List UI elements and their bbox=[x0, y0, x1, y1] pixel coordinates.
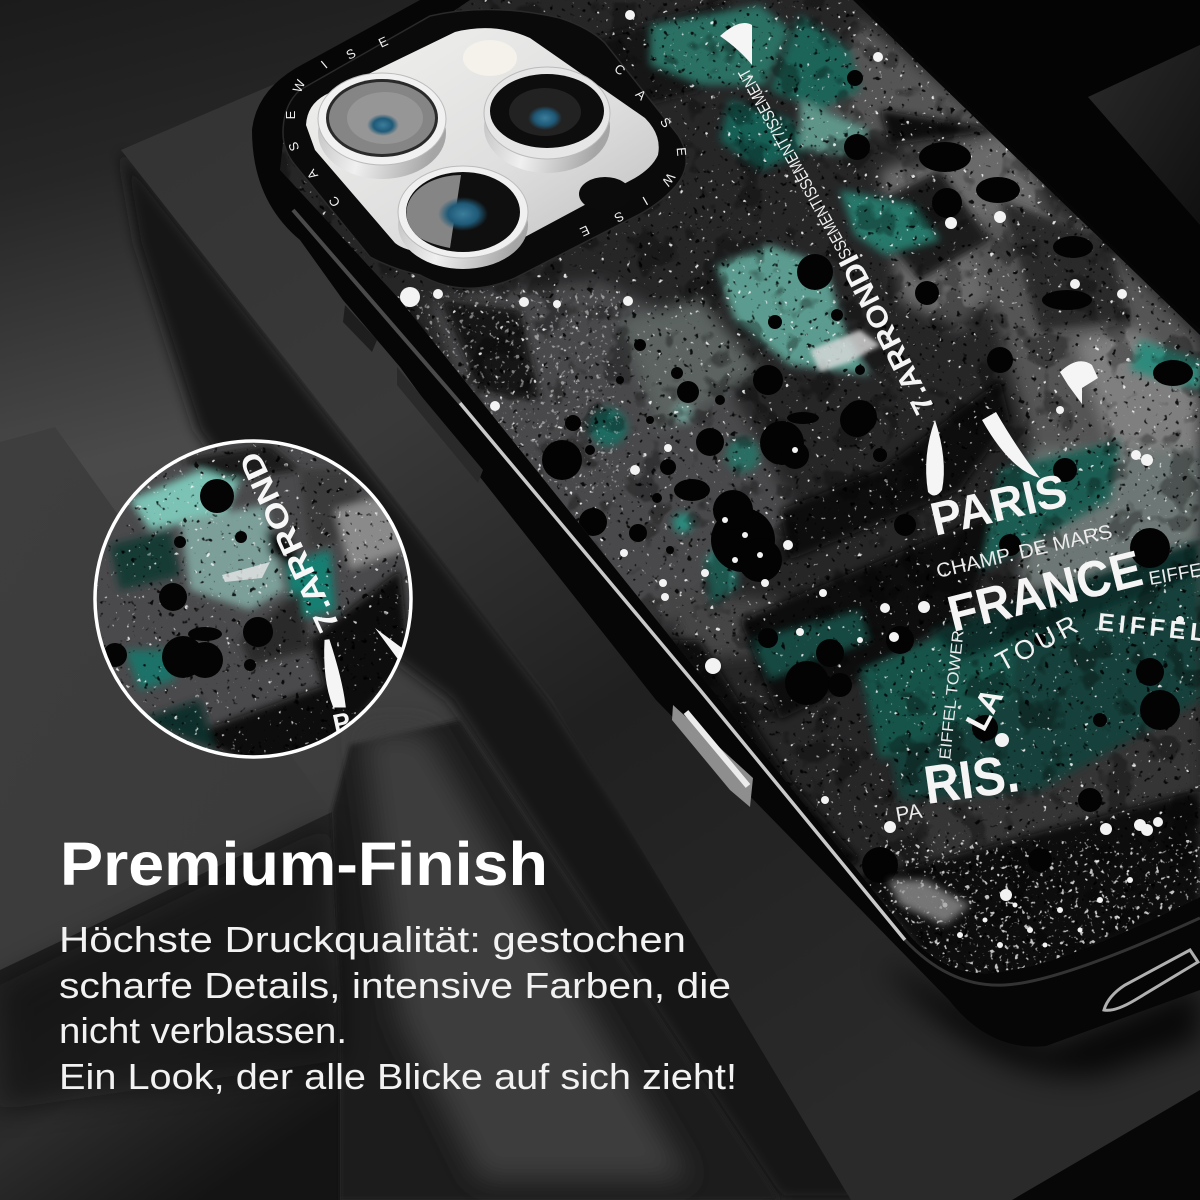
casewise lettering: W bbox=[290, 77, 309, 95]
casewise lettering: A bbox=[633, 86, 649, 103]
lower right shadow corner bbox=[1012, 1090, 1200, 1200]
graffiti: la: LA bbox=[958, 682, 1010, 736]
lens 2 bbox=[484, 67, 610, 173]
bottom front block bbox=[0, 812, 340, 1200]
graffiti: pa: PA bbox=[894, 800, 924, 827]
casewise lettering: S bbox=[611, 208, 626, 226]
side button slot bbox=[397, 367, 483, 483]
casewise lettering: C bbox=[325, 193, 343, 210]
case bumper bbox=[252, 0, 1200, 1047]
graffiti: 7. arrondissement: 7.ARRONDI bbox=[833, 249, 941, 419]
casewise lettering: S bbox=[344, 45, 359, 63]
casewise lettering: E bbox=[376, 33, 390, 51]
lower grey light streak bbox=[362, 730, 690, 1180]
inset splats bbox=[103, 479, 273, 678]
body text bbox=[59, 919, 737, 1097]
phone shadow bbox=[880, 960, 1200, 1077]
ring bbox=[283, 9, 686, 288]
casewise lettering: I bbox=[318, 58, 330, 71]
casewise lettering: E bbox=[283, 110, 298, 119]
rim lower edge bbox=[905, 918, 1200, 985]
white splats bbox=[400, 10, 1184, 948]
casewise lettering: E bbox=[578, 222, 592, 240]
rim bright highlight bbox=[460, 403, 905, 940]
phone body bbox=[250, 0, 1200, 1060]
flash bbox=[463, 40, 517, 76]
casewise lettering: C bbox=[611, 61, 628, 78]
graffiti: paris: PARIS bbox=[925, 463, 1072, 546]
inset spray marks bbox=[327, 640, 343, 705]
dense white splatter at case bottom bbox=[880, 840, 1200, 973]
inset text: p: P bbox=[330, 706, 353, 739]
rim dim edge bbox=[293, 210, 460, 403]
casewise lettering bbox=[283, 33, 689, 240]
teal paint patches bbox=[589, 5, 1200, 800]
window bbox=[306, 28, 659, 255]
platform side face bbox=[121, 150, 880, 1200]
graffiti: paris bottom: RIS. bbox=[920, 743, 1023, 816]
bottom paint speck bbox=[888, 880, 970, 925]
black splats bbox=[526, 70, 1193, 883]
graffiti: tour: TOUR bbox=[991, 609, 1083, 677]
inset border bbox=[95, 441, 411, 757]
inset white paint bbox=[222, 562, 270, 582]
casewise lettering: W bbox=[659, 170, 678, 190]
white paint flecks bbox=[810, 330, 880, 372]
casewise lettering: S bbox=[285, 140, 302, 153]
graffiti: eiffel tower vertical: EIFFEL TOWER bbox=[937, 629, 968, 760]
top right dark wall bbox=[850, 0, 1200, 330]
case artwork bbox=[280, 0, 1200, 974]
casewise lettering: I bbox=[640, 193, 651, 208]
top right block bbox=[1088, 45, 1200, 225]
inset text: 7. arrond: 7.ARROND bbox=[232, 446, 346, 638]
bottom port bbox=[1104, 950, 1198, 1010]
eiffel spray marks bbox=[720, 23, 1098, 496]
noise blobs and splatter bbox=[280, 0, 1200, 881]
grey paint strokes bbox=[430, 20, 1200, 900]
silver side button bbox=[672, 705, 753, 807]
body text: Ein Look, der alle Blicke auf sich zieht! bbox=[59, 1056, 737, 1097]
graffiti: issement repeat: SSEMENTISSEMENT7ISSEMENT bbox=[735, 65, 855, 262]
heading: Premium-Finish bbox=[60, 830, 548, 898]
left block top bbox=[0, 427, 332, 970]
lens 3 bbox=[398, 166, 528, 269]
casewise lettering: S bbox=[657, 115, 675, 131]
microphone hole bbox=[579, 177, 631, 211]
casewise lettering: E bbox=[674, 147, 689, 157]
graffiti: champ de mars: CHAMP. DE MARS bbox=[934, 521, 1115, 583]
side hole bbox=[343, 305, 377, 352]
casewise lettering: A bbox=[303, 166, 321, 182]
zoom circle inset bbox=[90, 436, 416, 765]
camera module bbox=[283, 9, 689, 288]
body text: nicht verblassen. bbox=[59, 1010, 347, 1051]
under text darkening bbox=[0, 825, 340, 1110]
lens 1 bbox=[318, 73, 446, 179]
body text: scharfe Details, intensive Farben, die bbox=[59, 965, 731, 1006]
body text: Höchste Druckqualität: gestochen bbox=[59, 919, 686, 960]
lower dark channel bbox=[332, 720, 780, 1200]
dense white splatter at case left bbox=[400, 290, 620, 490]
graffiti: france: FRANCE bbox=[942, 539, 1148, 643]
black paint strokes bbox=[440, 0, 1200, 1010]
inset paint bbox=[110, 445, 410, 765]
